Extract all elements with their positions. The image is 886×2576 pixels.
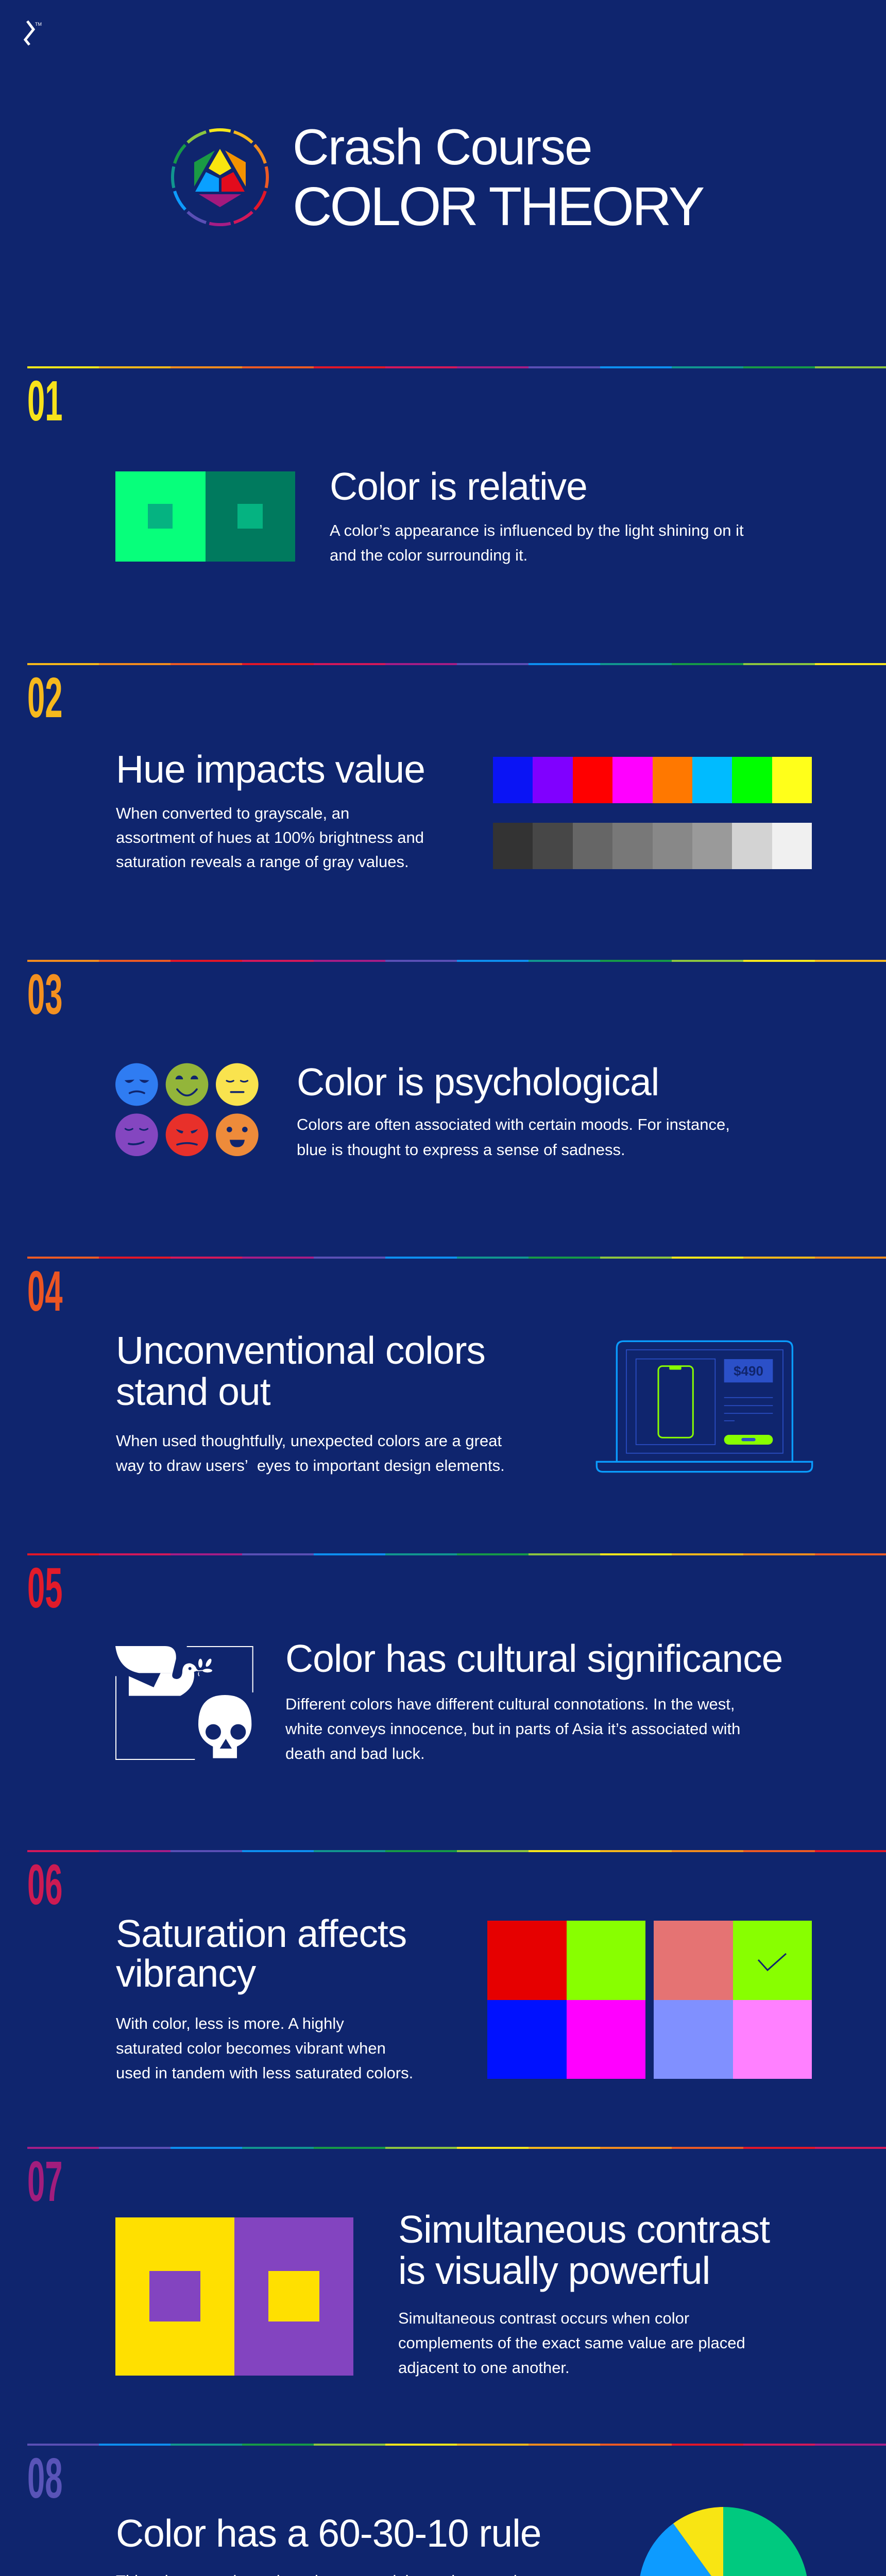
illustration: simultaneous contrast [115, 2217, 353, 2376]
title: Crash Course [293, 118, 592, 175]
text 01: A color’s appearance is influenced by the light shining on it [330, 521, 744, 539]
text 07 [398, 2309, 745, 2377]
text 05 [285, 1695, 740, 1762]
heading 03: Color is psychological [297, 1060, 659, 1104]
text 05: white conveys innocence, but in parts of Asia it’s associated with [285, 1720, 740, 1738]
heading 04: Unconventional colors [116, 1329, 485, 1372]
===== 07 ===== [27, 2147, 886, 2149]
number 04: 04 [27, 1260, 63, 1323]
heading 07: Simultaneous contrast [398, 2208, 770, 2251]
===== 03 ===== [27, 960, 886, 962]
text 04: way to draw users’ eyes to important design elements. [116, 1456, 505, 1475]
title: COLOR THEORY [293, 176, 703, 237]
heading 05: Color has cultural significance [285, 1637, 782, 1680]
chart: hue swatches and gray values [493, 757, 812, 869]
text 03 [297, 1115, 730, 1159]
===== 08 ===== [27, 2444, 886, 2446]
text 06: used in tandem with less saturated colors. [116, 2064, 413, 2082]
icon: laptop with product page: $490 [734, 1363, 763, 1379]
text 04: When used thoughtfully, unexpected colors are a great [116, 1432, 502, 1450]
text 01: and the color surrounding it. [330, 546, 527, 564]
text 03: blue is thought to express a sense of sadness. [297, 1141, 625, 1159]
heading 07 [398, 2208, 770, 2292]
text 06: saturated color becomes vibrant when [116, 2039, 386, 2057]
text 07: complements of the exact same value are placed [398, 2334, 745, 2352]
text 07: adjacent to one another. [398, 2359, 570, 2377]
heading 04 [116, 1329, 485, 1413]
heading 06 [116, 1912, 406, 1995]
number 02: 02 [27, 666, 63, 730]
icon: toptal mark top-left [24, 21, 42, 45]
text 05: death and bad luck. [285, 1744, 425, 1762]
heading 06: Saturation affects [116, 1912, 406, 1955]
icon: toptal mark top-left: TM [35, 22, 42, 27]
number 01: 01 [27, 369, 63, 433]
number 07: 07 [27, 2150, 63, 2213]
heading 01: Color is relative [330, 465, 587, 508]
text 03: Colors are often associated with certain moods. For instance, [297, 1115, 730, 1133]
heading 06: vibrancy [116, 1952, 255, 1995]
===== 02 ===== [27, 663, 886, 665]
===== 01 ===== [27, 366, 886, 368]
heading 02: Hue impacts value [116, 748, 425, 791]
illustration: relative color squares [115, 471, 295, 562]
icon: laptop with product page [595, 1341, 813, 1472]
text 01 [330, 521, 744, 564]
title [293, 118, 704, 237]
text 02: When converted to grayscale, an [116, 804, 349, 822]
icon: mood faces [115, 1063, 259, 1156]
text 07: Simultaneous contrast occurs when color [398, 2309, 689, 2327]
===== 05 ===== [27, 1553, 886, 1555]
icon: checkmark [758, 1953, 787, 1971]
number 05: 05 [27, 1556, 63, 1620]
text 02: assortment of hues at 100% brightness and [116, 828, 424, 846]
number 03: 03 [27, 963, 63, 1026]
text 05: Different colors have different cultural connotations. In the west, [285, 1695, 735, 1713]
text 06: With color, less is more. A highly [116, 2014, 344, 2032]
text 02: saturation reveals a range of gray values. [116, 853, 409, 871]
chart: saturation grids [487, 1921, 812, 2079]
heading 07: is visually powerful [398, 2249, 710, 2292]
heading 04: stand out [116, 1370, 270, 1413]
text 04 [116, 1432, 505, 1475]
text 02 [116, 804, 424, 871]
icon: color theory logo [171, 128, 269, 226]
===== 06 ===== [27, 1850, 886, 1852]
===== 04 ===== [27, 1257, 886, 1259]
heading 08: Color has a 60-30-10 rule [116, 2512, 541, 2555]
number 06: 06 [27, 1853, 63, 1917]
text 06 [116, 2014, 413, 2082]
number 08: 08 [27, 2447, 63, 2510]
icon: dove and skull [115, 1646, 253, 1760]
chart: pie 60/30/10 [640, 2507, 807, 2576]
